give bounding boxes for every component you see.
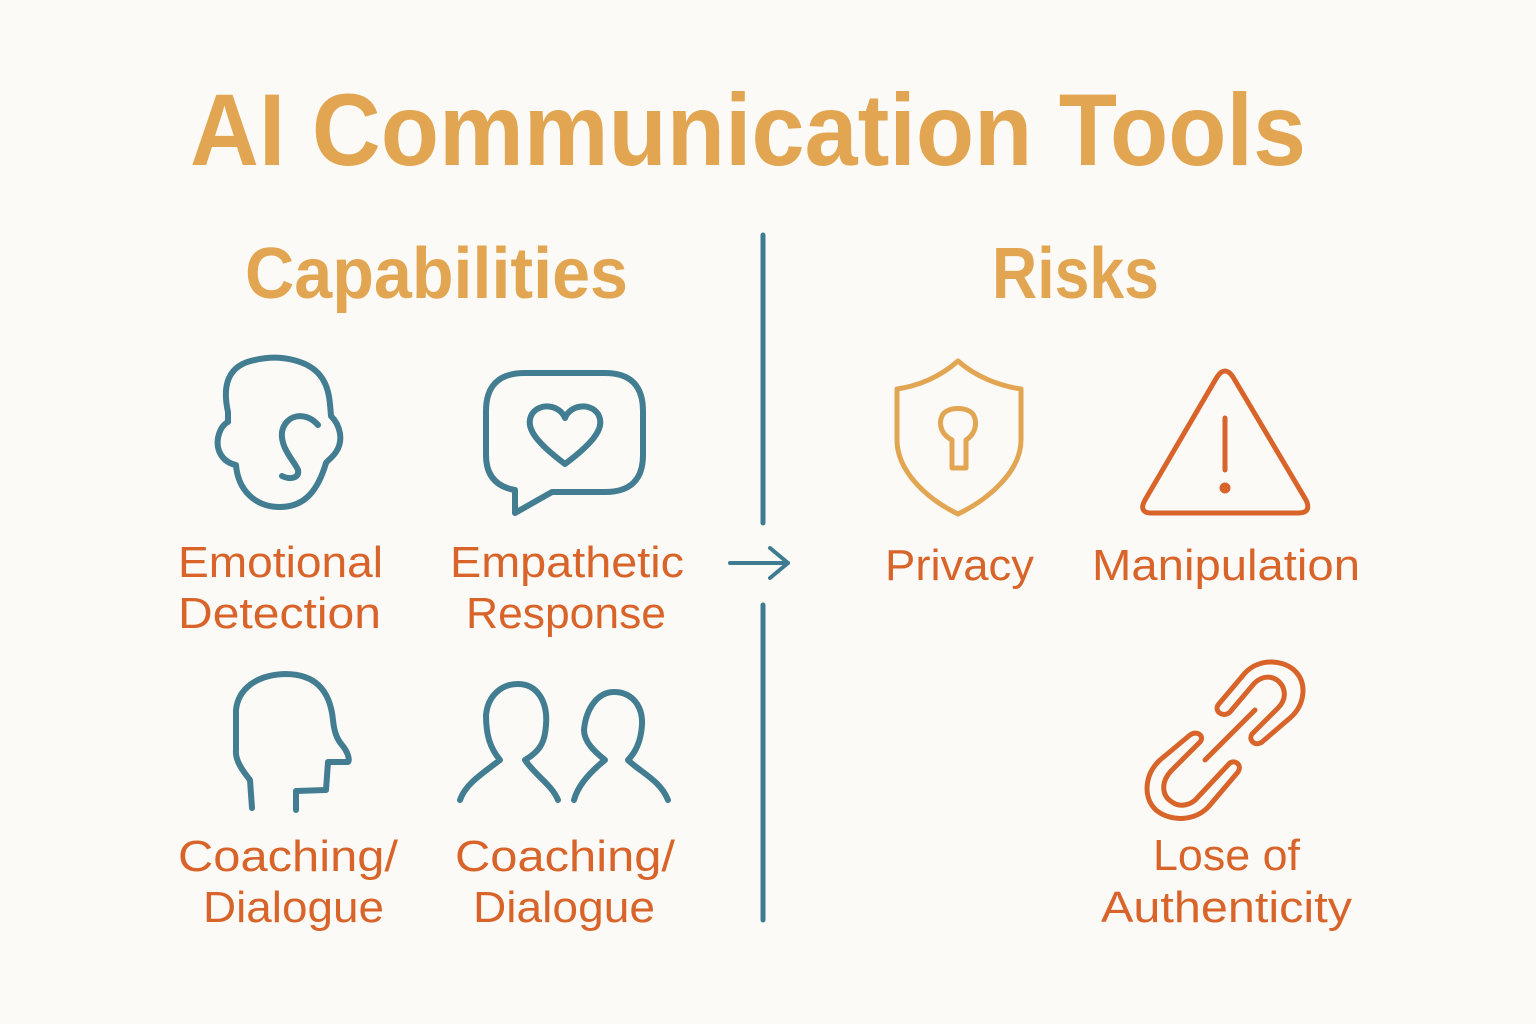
icon: coaching head profile: [236, 674, 349, 810]
label: privacy: Privacy: [885, 541, 1034, 590]
icon: chain link: [1147, 662, 1303, 818]
label: coaching dialogue 1: Dialogue: [203, 883, 384, 932]
icon: manipulation warning: [1143, 371, 1308, 513]
label: empathetic response: [450, 538, 684, 638]
arrow: [730, 548, 788, 578]
label: coaching dialogue 2: Coaching/: [455, 832, 676, 881]
label: empathetic response: Response: [466, 589, 666, 638]
title: AI Communication Tools: [190, 73, 1306, 187]
heading: risks: Risks: [992, 234, 1159, 314]
label: lose of authenticity: Lose of: [1153, 831, 1301, 880]
label: emotional detection: Detection: [178, 589, 381, 638]
label: emotional detection: Emotional: [178, 538, 383, 587]
label: emotional detection: [178, 538, 383, 638]
icon: dialogue two people: [460, 684, 668, 800]
label: empathetic response: Empathetic: [450, 538, 684, 587]
label: lose of authenticity: Authenticity: [1101, 883, 1352, 932]
divider line: [760, 235, 766, 920]
heading: capabilities: Capabilities: [245, 234, 628, 314]
label: coaching dialogue 2: Dialogue: [473, 883, 655, 932]
label: coaching dialogue 1: Coaching/: [178, 832, 399, 881]
label: lose of authenticity: [1101, 831, 1352, 932]
icon: privacy shield: [897, 361, 1021, 514]
icon: emotional detection head: [218, 358, 340, 507]
label: coaching dialogue 2: [455, 832, 676, 932]
icon: empathetic response speech bubble: [486, 373, 643, 513]
label: manipulation: Manipulation: [1092, 541, 1360, 590]
label: coaching dialogue 1: [178, 832, 399, 932]
